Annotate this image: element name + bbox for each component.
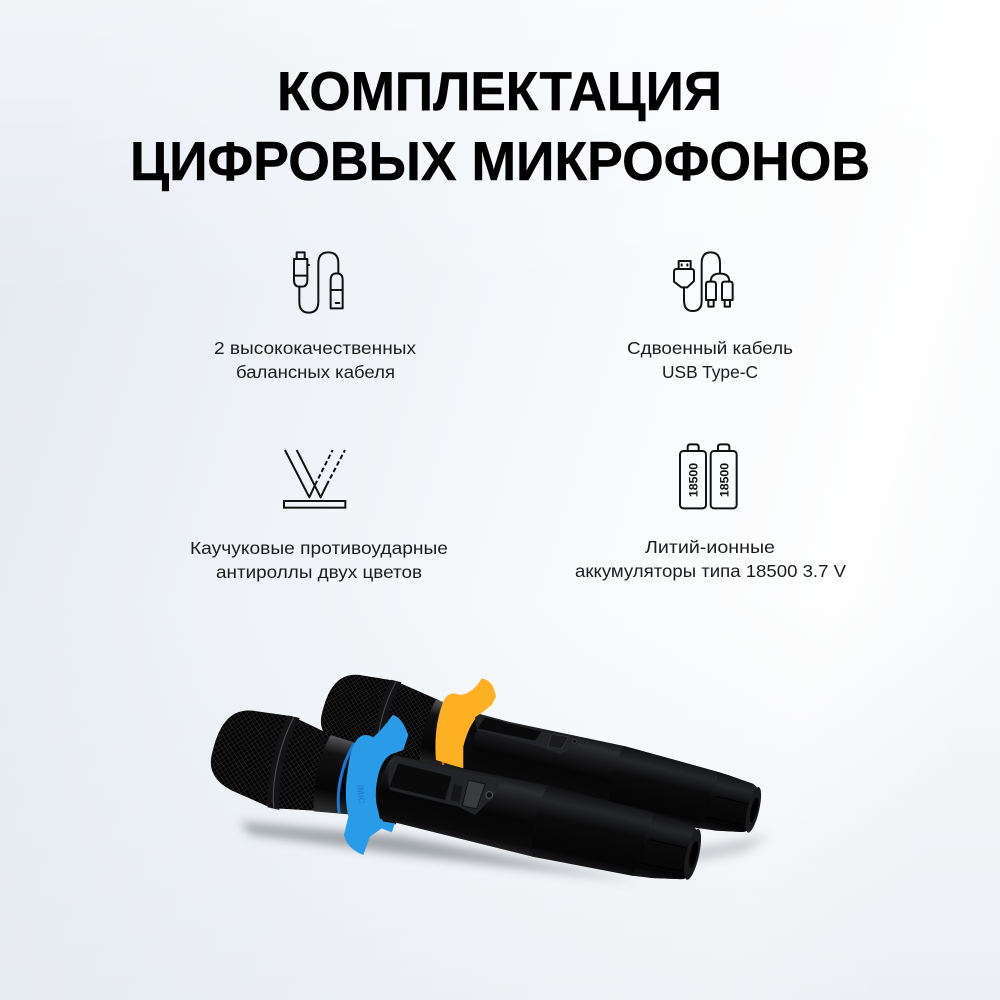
caption: balanced cables xyxy=(214,338,416,382)
caption: batteries xyxy=(575,537,846,581)
item: rubber anti-rolls xyxy=(190,450,448,582)
icon: shock reflection xyxy=(284,450,345,508)
caption: batteries: Литий-ионные xyxy=(645,537,775,557)
photo: two microphones xyxy=(203,666,770,892)
item: dual USB-C cable xyxy=(627,252,793,382)
title xyxy=(130,60,870,192)
title: КОМПЛЕКТАЦИЯ xyxy=(277,60,722,122)
item: batteries xyxy=(575,444,846,581)
item: balanced cables xyxy=(214,252,416,382)
caption: batteries: аккумуляторы типа 18500 3.7 V xyxy=(575,561,846,581)
title: ЦИФРОВЫХ МИКРОФОНОВ xyxy=(130,130,870,192)
icon: two 18500 batteries: 18500 xyxy=(717,463,731,497)
anti-roll: blue xyxy=(344,715,408,855)
caption: balanced cables: балансных кабеля xyxy=(236,362,395,382)
caption: rubber anti-rolls: антироллы двух цветов xyxy=(216,562,422,582)
icon: balanced cable xyxy=(294,252,343,313)
front mic control panel xyxy=(388,760,500,815)
caption: dual USB-C cable: USB Type-C xyxy=(662,362,758,382)
anti-roll: blue: iMIC xyxy=(355,784,367,805)
caption: dual USB-C cable: Сдвоенный кабель xyxy=(627,338,793,358)
caption: rubber anti-rolls: Каучуковые противоударные xyxy=(190,538,448,558)
caption: balanced cables: 2 высококачественных xyxy=(214,338,416,358)
microphone: front with blue anti-roll xyxy=(203,701,707,892)
icon: two 18500 batteries xyxy=(680,444,737,508)
anti-roll: yellow xyxy=(435,678,496,768)
shadows xyxy=(240,822,770,882)
icon: two 18500 batteries: 18500 xyxy=(687,463,701,497)
microphone: rear with yellow anti-roll xyxy=(314,666,766,844)
caption: rubber anti-rolls xyxy=(190,538,448,582)
icon: dual USB cable xyxy=(674,252,733,311)
caption: dual USB-C cable xyxy=(627,338,793,382)
rear mic control panel xyxy=(475,714,582,754)
